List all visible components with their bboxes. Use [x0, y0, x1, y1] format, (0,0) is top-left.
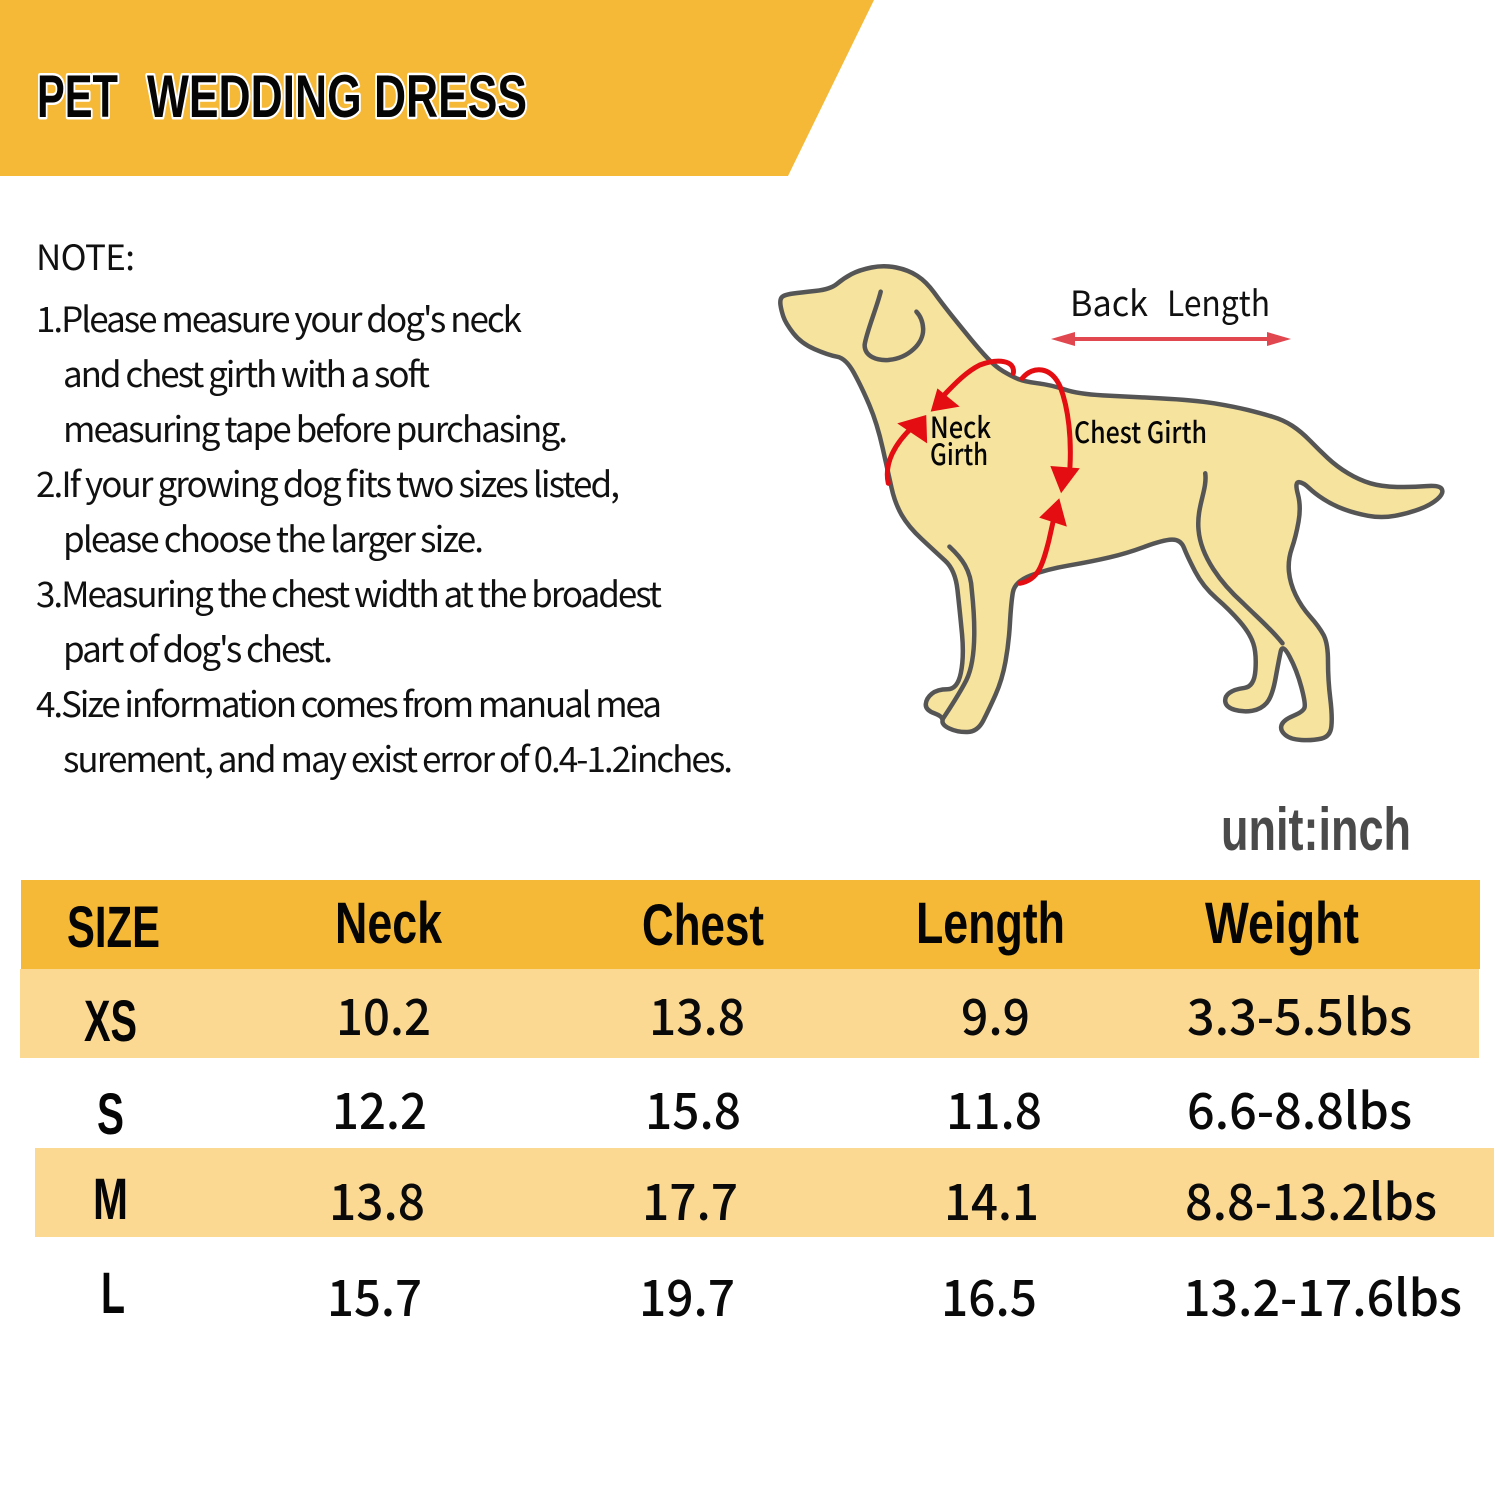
row XS: XS [84, 989, 137, 1054]
row S: 15.8 [645, 1072, 741, 1144]
back length label [1070, 276, 1270, 327]
size table [20, 880, 1494, 1331]
row L: 19.7 [639, 1259, 735, 1331]
notes text block: 1.Please measure your dog's neck [36, 292, 522, 343]
row XS: 9.9 [961, 978, 1030, 1050]
back length label: Length [1167, 276, 1270, 327]
row S: 6.6-8.8lbs [1187, 1072, 1412, 1144]
row XS: 13.8 [649, 978, 745, 1050]
notes text block: and chest girth with a soft [63, 347, 430, 398]
row M [35, 1148, 1494, 1237]
chest girth label: Chest Girth [1074, 410, 1207, 452]
table header row: Length [916, 891, 1065, 956]
notes text block: part of dog's chest. [63, 622, 333, 673]
notes text block [36, 230, 733, 783]
table header row [21, 880, 1480, 969]
row XS: 10.2 [336, 978, 431, 1050]
title: WEDDING DRESS [147, 63, 527, 130]
notes text block: 4.Size information comes from manual mea [36, 677, 662, 728]
notes text block: NOTE: [36, 230, 135, 281]
row L [101, 1259, 1462, 1331]
row S: S [97, 1082, 124, 1147]
notes text block: 3.Measuring the chest width at the broadest [36, 567, 662, 618]
row L: 13.2-17.6lbs [1183, 1259, 1462, 1331]
row M: 17.7 [642, 1163, 738, 1235]
row XS [20, 969, 1479, 1058]
dog body [780, 266, 1442, 740]
neck girth label: Neck [930, 405, 991, 447]
row XS: 3.3-5.5lbs [1187, 978, 1412, 1050]
row S [97, 1072, 1412, 1147]
neck girth label: Girth [930, 432, 988, 474]
row M: 8.8-13.2lbs [1185, 1163, 1437, 1235]
title banner [0, 0, 874, 176]
back length arrow [1051, 332, 1291, 346]
red girth arrows [887, 361, 1080, 583]
dog measurement illustration [780, 266, 1442, 740]
notes text block: please choose the larger size. [63, 512, 484, 563]
title: PET [37, 63, 118, 130]
table header row: Weight [1205, 891, 1359, 956]
unit label: unit:inch [1221, 796, 1411, 863]
notes text block: 2.If your growing dog fits two sizes listed, [36, 457, 620, 508]
title [37, 63, 527, 130]
row S: 12.2 [332, 1072, 427, 1144]
row L: 16.5 [941, 1259, 1037, 1331]
row L: 15.7 [327, 1259, 422, 1331]
notes text block: surement, and may exist error of 0.4-1.2inches. [63, 732, 733, 783]
table header row: Neck [335, 891, 443, 956]
row L: L [101, 1261, 125, 1326]
table header row: Chest [642, 893, 764, 958]
row M: M [93, 1167, 128, 1232]
table header row: SIZE [67, 895, 160, 960]
row M: 13.8 [329, 1163, 425, 1235]
row M: 14.1 [944, 1163, 1039, 1235]
back length label: Back [1070, 276, 1148, 327]
notes text block: measuring tape before purchasing. [63, 402, 568, 453]
neck girth label [930, 405, 991, 474]
row S: 11.8 [946, 1072, 1042, 1144]
